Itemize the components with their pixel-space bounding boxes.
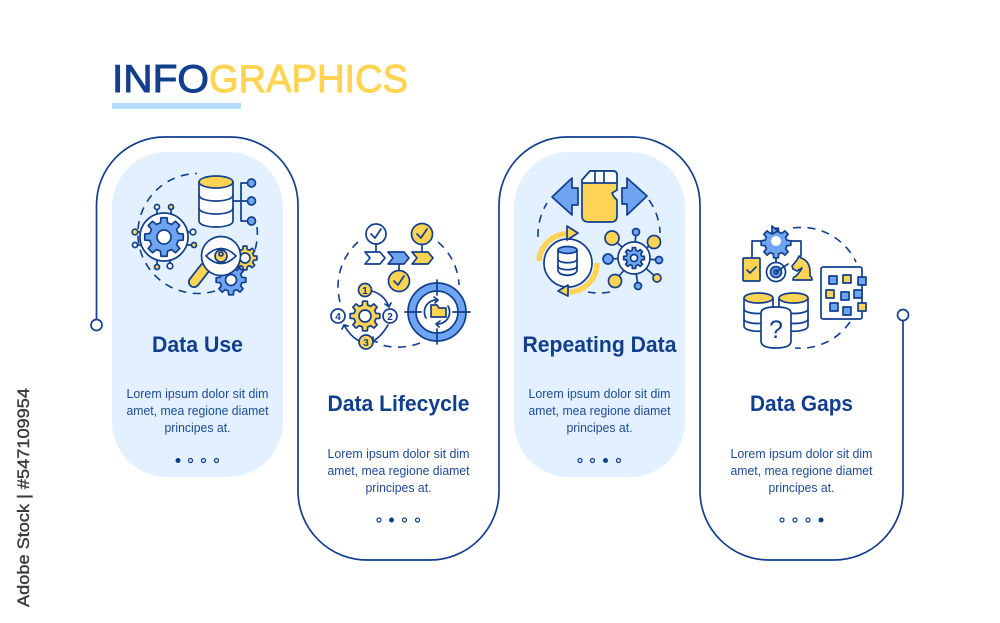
network gear [603,228,662,290]
title underline [112,103,241,109]
icon: data use [132,174,257,295]
text block: data use: Lorem ipsum dolor sit dim [126,387,268,401]
icon: data gaps [743,226,866,348]
text block: data use [126,387,269,435]
title: INFO [112,58,209,101]
heading: data lifecycle: Data Lifecycle [328,391,470,416]
small gears [216,246,257,295]
numbered cycle: 2 [387,312,393,323]
numbered cycle: 1 [362,286,368,297]
database with cycle arrows [539,226,597,296]
text block: data use: amet, mea regione diamet [126,404,269,418]
text block: data gaps: amet, mea regione diamet [730,464,873,478]
heading: repeating data: Repeating Data [522,332,677,357]
start node [91,320,102,330]
magnifier with eye [194,236,240,282]
text block: repeating data: principes at. [566,421,632,435]
stock side label: Adobe Stock | #547109954 [14,388,33,607]
text block: data gaps: principes at. [768,481,834,495]
text block: repeating data: Lorem ipsum dolor sit dim [528,387,670,401]
icon: data lifecycle [331,224,470,349]
question databases: ? [769,316,783,344]
title [112,58,408,101]
right arrow [622,178,647,215]
text block: data lifecycle: Lorem ipsum dolor sit dim [328,447,470,461]
text block: repeating data [528,387,671,435]
text block: data gaps [730,447,873,495]
left arrow [552,178,578,215]
pagination dots: repeating data [578,458,620,463]
pagination dots: data lifecycle [377,518,420,522]
title: GRAPHICS [209,58,408,101]
icon: repeating data [538,171,662,296]
memory card [582,171,617,222]
target with folder [405,280,470,344]
pagination dots: data use [176,458,218,463]
text block: repeating data: amet, mea regione diamet [528,404,671,418]
numbered cycle: 3 [363,338,369,349]
gear hub [132,204,196,270]
text block: data gaps: Lorem ipsum dolor sit dim [730,447,872,461]
numbered cycle [331,284,397,349]
strategy group [743,226,812,282]
connecting outline [96,137,903,560]
text block: data lifecycle [328,447,470,495]
data grid [821,267,866,319]
heading: data gaps: Data Gaps [750,391,853,416]
text block: data lifecycle: amet, mea regione diamet [328,464,470,478]
heading: data use: Data Use [152,332,243,357]
numbered cycle: 4 [335,312,341,323]
text block: data lifecycle: principes at. [366,481,432,495]
panel background: data use [112,152,283,477]
end node [898,310,908,320]
panel background: repeating data [514,152,685,477]
process chain [365,224,433,292]
pagination dots: data gaps [780,518,824,522]
database [199,176,256,227]
text block: data use: principes at. [164,421,230,435]
